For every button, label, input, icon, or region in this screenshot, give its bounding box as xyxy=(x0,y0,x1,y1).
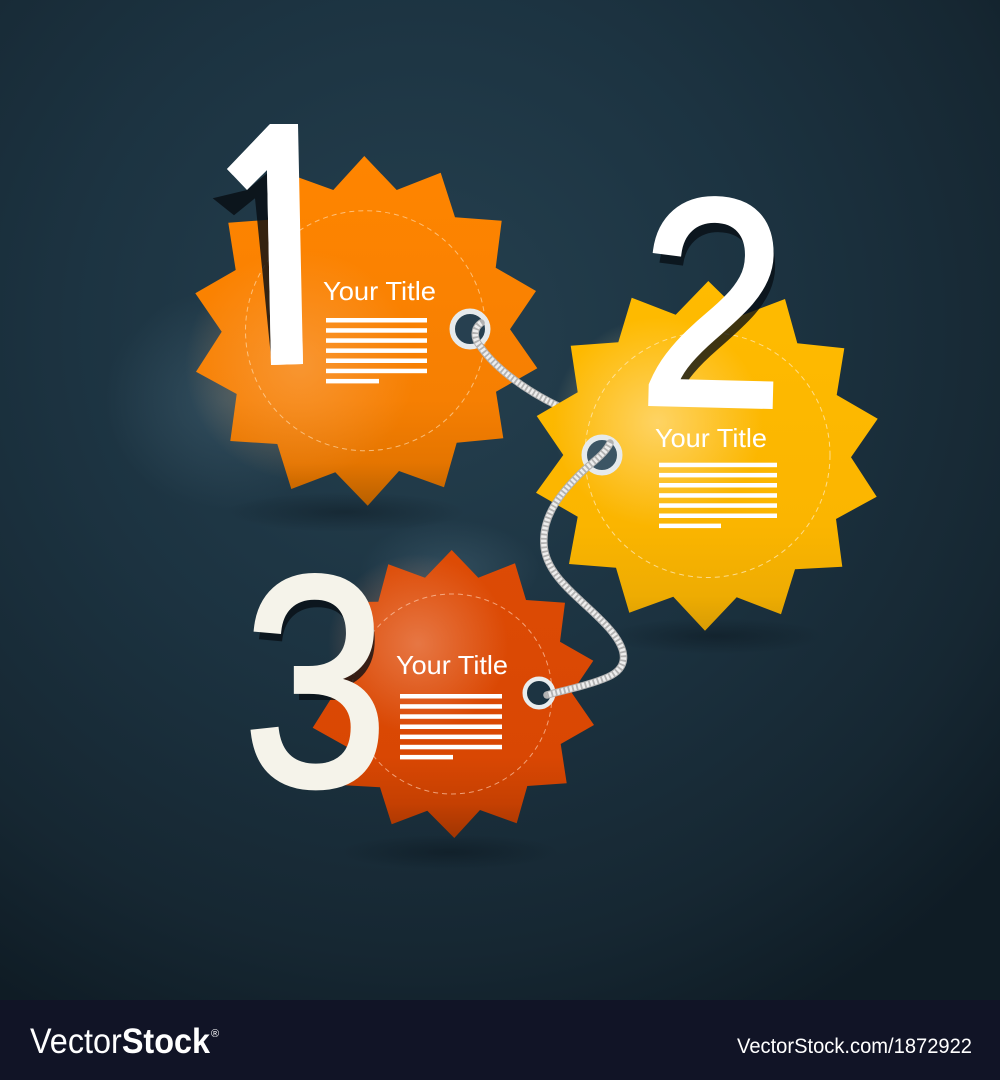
eyelet 1 xyxy=(452,311,488,347)
footer logo: VectorStock xyxy=(30,1022,210,1061)
footer image id: VectorStock.com/1872922 xyxy=(737,1035,972,1058)
dashed circle 1 xyxy=(246,211,486,451)
heading 1: Your Title xyxy=(323,276,436,306)
panel: step 3 red badge xyxy=(313,550,594,838)
eyelet 3 xyxy=(525,679,553,707)
text lines 2 xyxy=(659,463,777,528)
shadow of number 3 xyxy=(259,600,375,700)
panel: step 1 orange badge xyxy=(185,156,537,506)
star badge 3 xyxy=(313,550,594,838)
digit 3: 3 xyxy=(243,513,388,849)
heading 2: Your Title xyxy=(655,423,767,453)
dashed circle 3 xyxy=(352,594,552,794)
digit 2: 2 xyxy=(636,137,790,470)
panel: step 2 yellow badge xyxy=(536,281,878,631)
star badge 1 xyxy=(195,156,537,506)
rope from badge 2 to badge 3 xyxy=(544,443,624,695)
number 1 xyxy=(213,124,303,365)
rope from badge 1 to badge 2 xyxy=(475,323,560,407)
shadow of number 1 xyxy=(213,170,271,357)
heading 3: Your Title xyxy=(396,650,508,680)
number 2 xyxy=(648,196,776,409)
text lines 1 xyxy=(326,318,427,383)
registered mark: ® xyxy=(211,1028,219,1040)
star badge 2 xyxy=(536,281,878,631)
dashed circle 2 xyxy=(585,332,830,578)
digit 1: 1 xyxy=(171,47,374,442)
number 3 xyxy=(250,573,379,790)
highlight on badge 2 xyxy=(553,317,763,527)
background glow and drop shadows xyxy=(105,290,825,870)
text lines 3 xyxy=(400,694,502,759)
footer bar xyxy=(0,1000,1000,1080)
highlight on badge 3 xyxy=(328,554,508,734)
shadow of number 2 xyxy=(660,222,776,380)
highlight on badge 1 xyxy=(185,250,415,480)
eyelet 2 xyxy=(584,437,620,473)
